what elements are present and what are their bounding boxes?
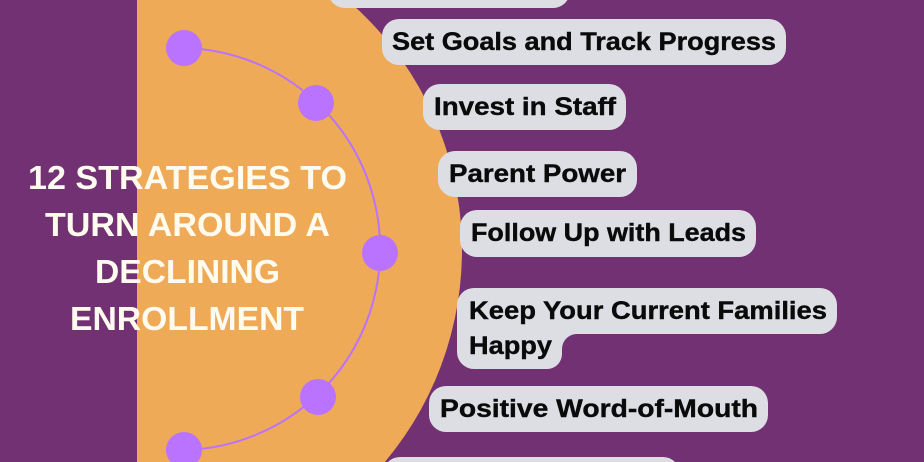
cropped pill at top: [331, 0, 567, 8]
strategy: invest in staff: [423, 84, 626, 130]
timeline arc with dots: [166, 30, 398, 462]
title: ENROLLMENT: [70, 301, 305, 338]
title: TURN AROUND A: [45, 207, 330, 244]
strategy: positive word-of-mouth: Positive Word-of-Mouth: [440, 395, 758, 423]
strategy: keep your current families happy: [457, 288, 837, 369]
strategy: parent power: Parent Power: [449, 160, 626, 188]
strategy: parent power: [438, 151, 637, 197]
strategy: follow up with leads: Follow Up with Leads: [471, 219, 746, 247]
strategy: set goals and track progress: Set Goals and Track Progress: [392, 28, 776, 56]
strategy: invest in staff: Invest in Staff: [434, 93, 617, 121]
strategy: positive word-of-mouth: [429, 386, 768, 432]
strategy: keep your current families happy: Happy: [469, 332, 552, 360]
strategy: set goals and track progress: [382, 19, 786, 65]
title: 12 STRATEGIES TO: [28, 160, 347, 197]
cropped pill at bottom: [388, 457, 675, 462]
title: [28, 160, 347, 338]
strategy: keep your current families happy: Keep Your Current Families: [469, 297, 827, 325]
title: DECLINING: [95, 254, 280, 291]
orange semicircle panel: [137, 0, 462, 462]
strategy: follow up with leads: [460, 210, 756, 257]
